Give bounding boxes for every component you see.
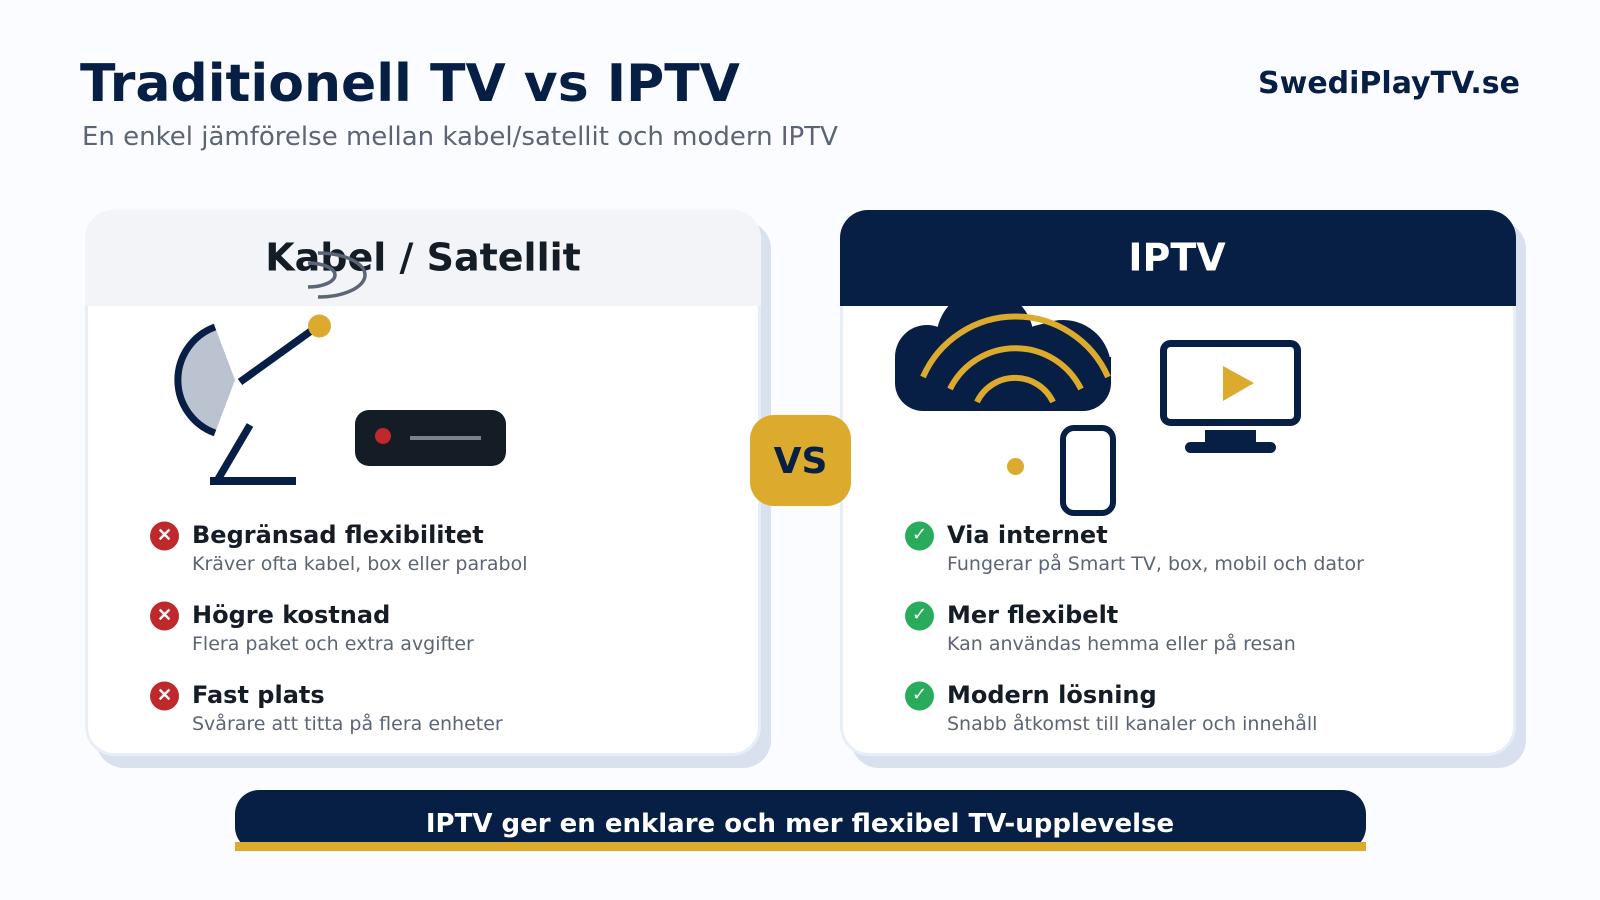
heading: kabel / satellit: Kabel / Satellit [265,236,581,280]
banner text: IPTV ger en enklare och mer flexibel TV-upplevelse [426,809,1174,839]
list item: fast plats: ✕ [157,685,172,706]
list item: fast plats [150,681,503,735]
icon: satellite dish [178,253,365,485]
list item: begränsad flexibilitet [150,521,528,575]
list item: modern lösning: ✓ [912,684,927,705]
list item: mer flexibelt [905,601,1296,655]
list item: mer flexibelt: ✓ [912,604,927,625]
icon: signal dot [1007,458,1024,475]
list item: modern lösning [905,681,1317,735]
panel header: iptv [840,210,1516,306]
list item: via internet: Fungerar på Smart TV, box, mobil och dator [947,552,1364,575]
list item: begränsad flexibilitet: Kräver ofta kabel, box eller parabol [192,553,528,575]
list item: högre kostnad: ✕ [157,605,172,626]
heading: iptv: IPTV [1128,236,1226,280]
list item: via internet: Via internet [947,521,1108,549]
list item: högre kostnad: Flera paket och extra avgifter [192,633,474,655]
vs badge [750,415,851,506]
list item: mer flexibelt: Kan användas hemma eller på resan [947,632,1296,655]
list item: begränsad flexibilitet: Begränsad flexibilitet [192,521,484,549]
list item: modern lösning: Modern lösning [947,681,1157,709]
list item: begränsad flexibilitet: ✕ [157,525,172,546]
icon: tv with play button [1164,344,1298,453]
panel: iptv [840,210,1526,768]
panel header: kabel / satellit [85,210,761,306]
list item: via internet: ✓ [912,524,927,545]
list item: via internet [905,521,1364,575]
panel: kabel / satellit [85,210,771,768]
bottom banner [235,790,1366,851]
list item: högre kostnad [150,601,474,655]
brand name: SwediPlayTV.se [1258,66,1520,101]
icon: phone [1063,428,1113,513]
list item: högre kostnad: Högre kostnad [192,601,390,629]
title: Traditionell TV vs IPTV [80,54,740,114]
list item: modern lösning: Snabb åtkomst till kanaler och innehåll [947,712,1317,735]
subtitle: En enkel jämförelse mellan kabel/satellit och modern IPTV [82,122,838,152]
icon: set-top box [355,410,506,466]
icon: cloud with wifi [895,306,1111,411]
list item: fast plats: Svårare att titta på flera enheter [192,712,503,735]
banner gold underline [235,842,1366,851]
vs badge: VS [774,441,827,482]
list item: fast plats: Fast plats [192,681,325,709]
list item: mer flexibelt: Mer flexibelt [947,601,1118,629]
